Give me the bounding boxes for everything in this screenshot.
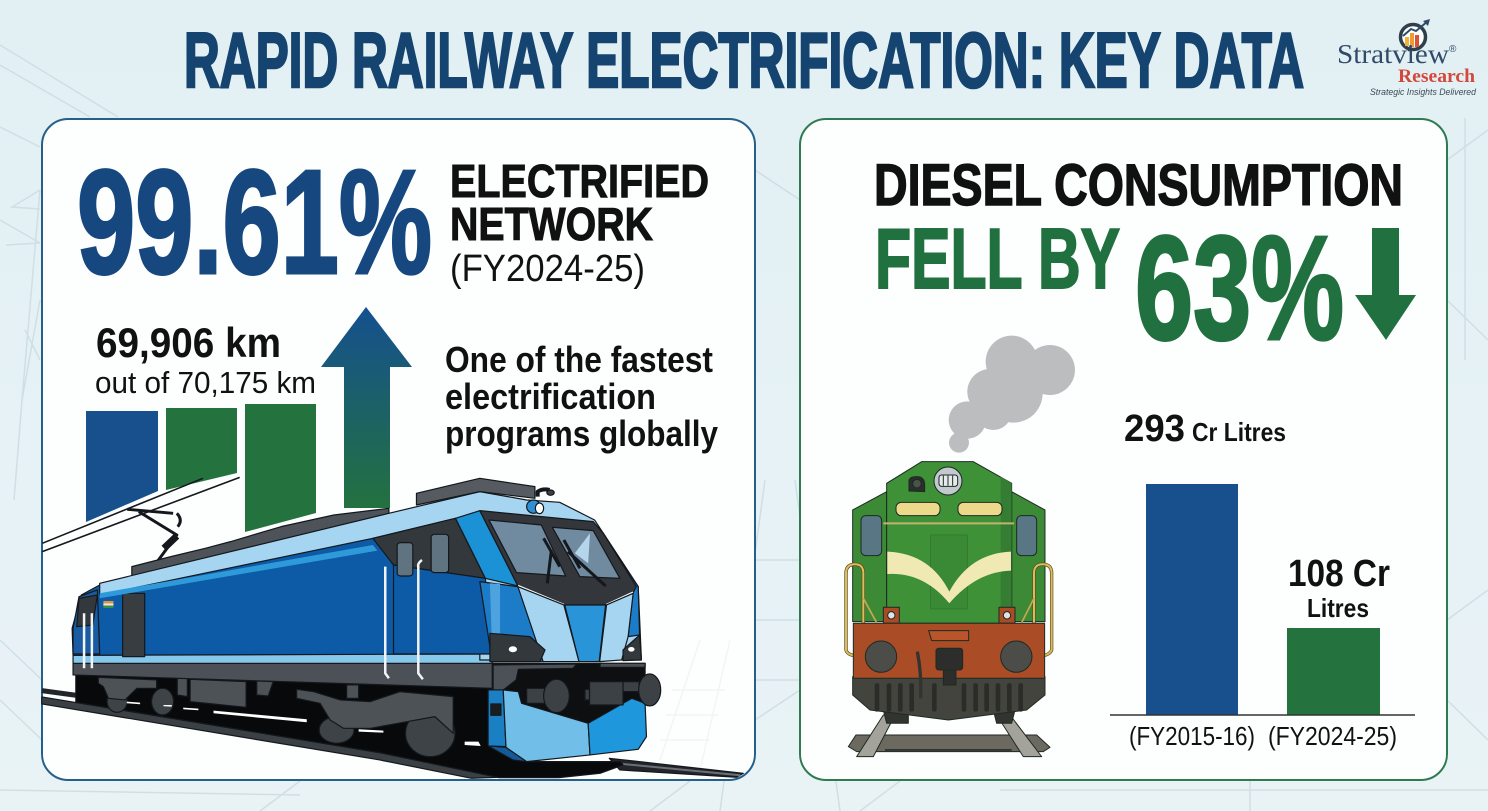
arrow: upward growth (321, 307, 412, 508)
roof box (416, 478, 535, 505)
bogie feet (883, 710, 1015, 723)
windscreen surround (480, 511, 636, 605)
headlights (490, 633, 641, 662)
roof equipment (132, 508, 389, 578)
km stat: out of 70,175 km (95, 365, 316, 400)
front black buffer beam (492, 663, 645, 723)
side bodies (853, 492, 887, 622)
arrow: down (1355, 228, 1416, 340)
right track (609, 758, 743, 777)
nose edges (518, 586, 633, 605)
bar: FY2024-25 (1287, 628, 1380, 715)
cab side windows (397, 534, 449, 576)
heading: electrified network (450, 155, 709, 290)
registered mark: ® (1449, 44, 1457, 55)
wipers (544, 538, 606, 586)
text: fastest programs: programs globally (445, 413, 718, 454)
logo subword: Research (1398, 66, 1475, 87)
far rail (42, 691, 86, 697)
axis label FY2024-25: (FY2024-25) (1268, 721, 1397, 751)
nose panels (518, 587, 579, 662)
heading: electrified network: ELECTRIFIED (450, 155, 709, 207)
marker lamp (909, 477, 925, 492)
panel background (800, 119, 1447, 780)
label 108 Cr: 108 Cr (1288, 553, 1390, 595)
catenary wires (42, 477, 240, 552)
pantograph (127, 509, 180, 565)
bar chart: diesel consumption (1110, 408, 1415, 751)
buffers (865, 641, 1032, 672)
text: fastest programs (445, 339, 718, 454)
wheels (107, 688, 455, 757)
bar: FY2015-16 (1146, 484, 1238, 715)
logo wordmark: Stratview (1337, 39, 1450, 69)
cowcatcher (488, 690, 646, 762)
panel: electrified network (42, 119, 755, 780)
corner plates (883, 607, 1015, 623)
label 293 Cr Litres: 293 (1124, 408, 1185, 450)
yellow plates (896, 502, 1002, 516)
brow rail (883, 520, 1014, 526)
top light (934, 467, 962, 495)
smoke (949, 336, 1075, 453)
grab rails (846, 564, 1052, 656)
heading: electrified network: (FY2024-25) (450, 248, 645, 290)
illustration: diesel locomotive (846, 336, 1075, 757)
chevron stripe (887, 552, 1011, 603)
white gaps between frame and track (127, 702, 481, 746)
icon: magnifier with chart (1400, 19, 1430, 50)
side windows (861, 516, 1037, 556)
red buffer beam (853, 623, 1045, 678)
panel background (42, 119, 755, 780)
lower grille (853, 677, 1045, 720)
heading: electrified network: NETWORK (450, 198, 653, 250)
rising bars (86, 404, 316, 532)
big stat 99.61%: 99.61% (77, 140, 432, 305)
bogies and tanks (98, 677, 453, 733)
windscreens (489, 520, 620, 578)
side dark panel (123, 593, 145, 657)
roof band (100, 492, 641, 660)
side body (72, 538, 492, 655)
light stripe (73, 653, 492, 663)
near track (42, 697, 499, 778)
baseline (1110, 714, 1415, 716)
text: fastest programs: electrification (445, 376, 656, 417)
rails (848, 715, 1050, 757)
logo: Stratview Research (1337, 19, 1477, 98)
subheading: fell by: FELL BY (875, 212, 1120, 307)
illustration: electric locomotive (42, 477, 743, 778)
km stat: 69,906 km (96, 319, 281, 366)
big stat 63%: 63% (1135, 206, 1344, 371)
indian flag (103, 601, 113, 608)
panel: diesel consumption (800, 119, 1447, 780)
horn (527, 489, 554, 514)
label 293 Cr Litres: Cr Litres (1192, 417, 1286, 447)
underframe (76, 673, 623, 778)
rear cab (73, 590, 100, 654)
front hood (887, 462, 1012, 623)
axis label FY2015-16: (FY2015-16) (1129, 721, 1255, 751)
blue cab edge (603, 533, 640, 637)
km stat (95, 319, 316, 400)
logo tagline: Strategic Insights Delivered (1370, 87, 1477, 98)
buffers (527, 674, 661, 713)
frame strip (73, 663, 493, 688)
coupler (936, 648, 963, 685)
beam top plate (493, 663, 645, 690)
label Litres: Litres (1307, 593, 1369, 623)
handrails (84, 560, 423, 679)
cab side (373, 518, 485, 578)
text: fastest programs: One of the fastest (445, 339, 713, 380)
door outline (931, 535, 967, 609)
